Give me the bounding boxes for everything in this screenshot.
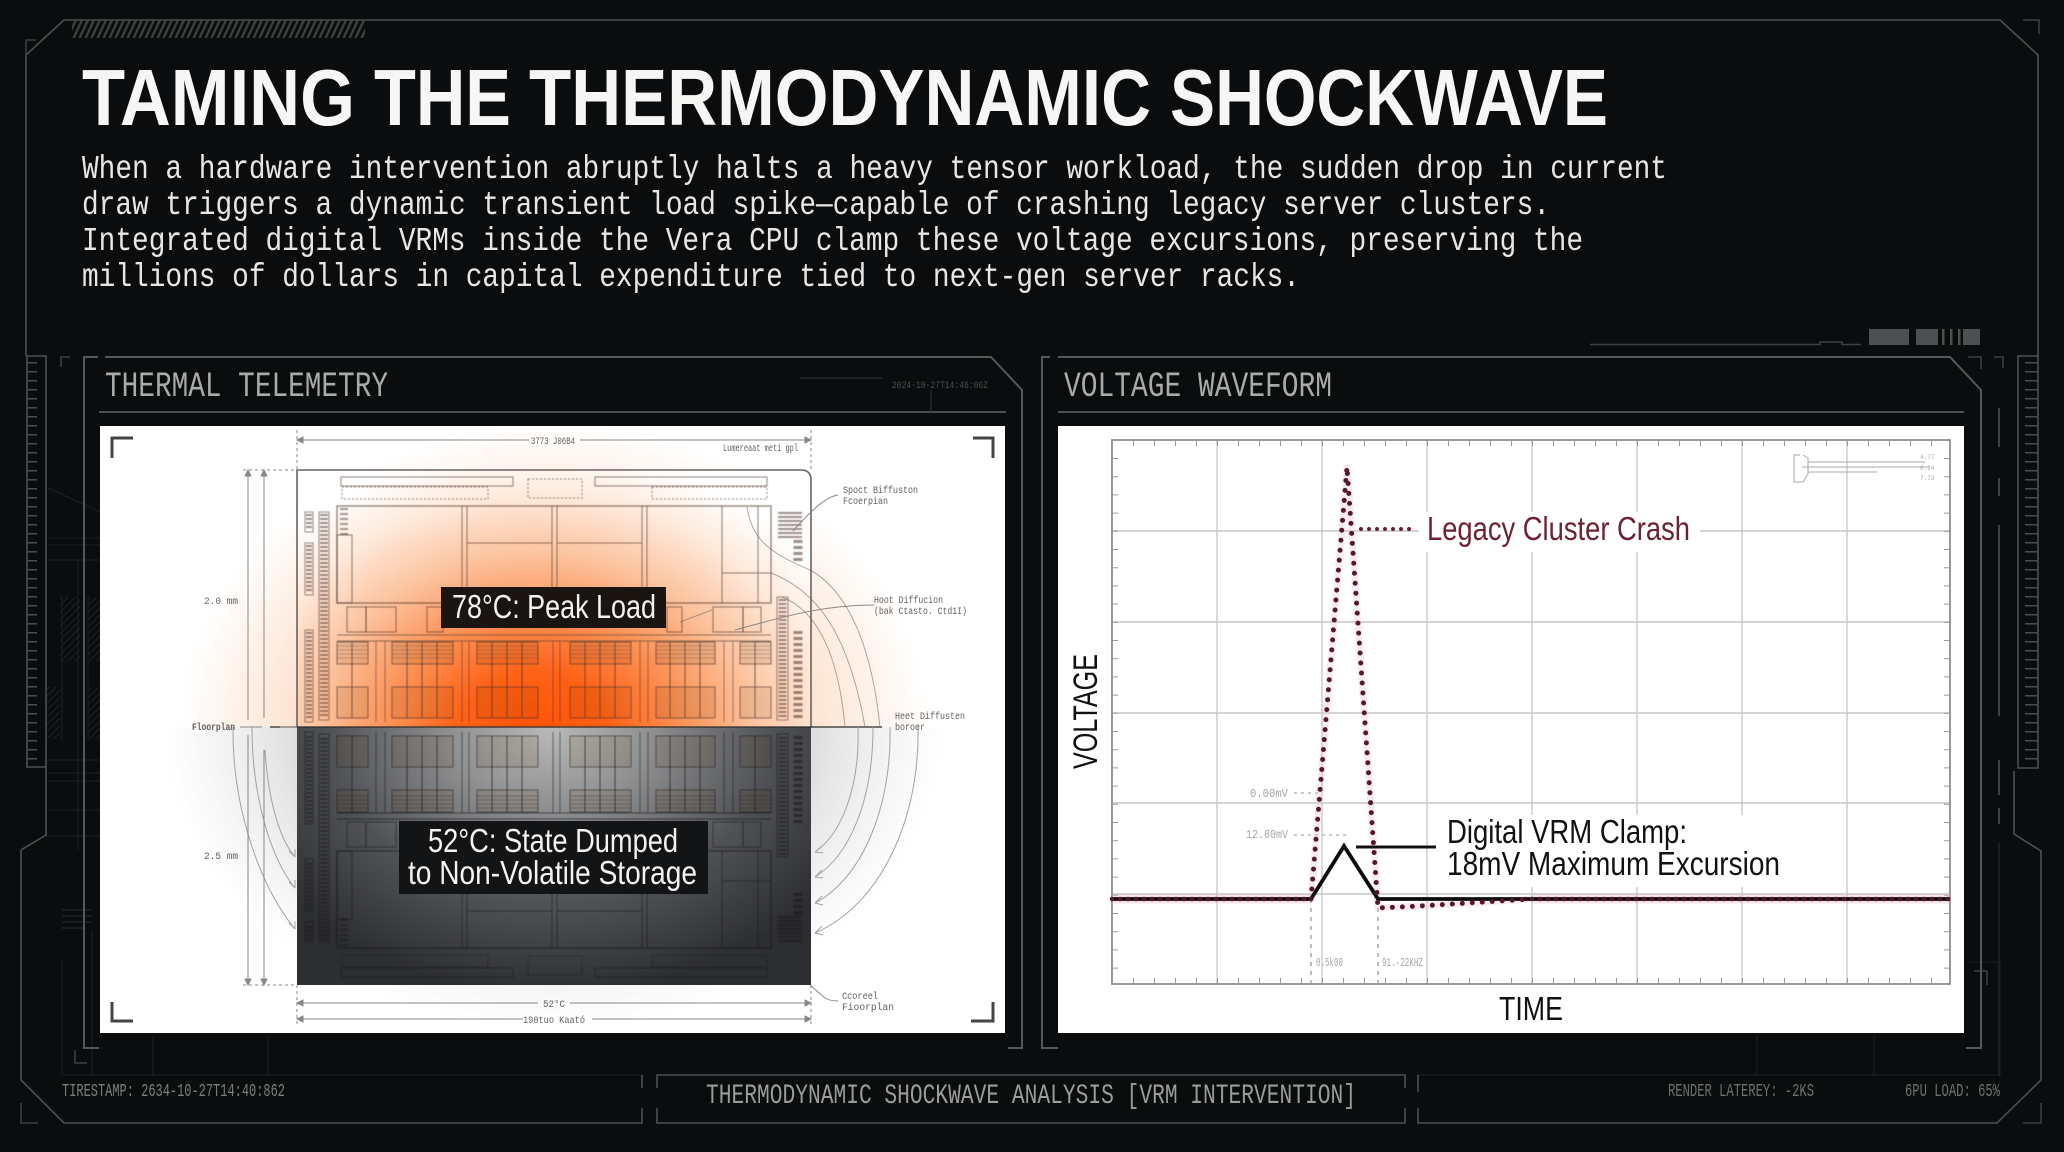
- inset mini waveform: 4.77: [1920, 454, 1935, 461]
- panel: voltage waveform: [1042, 357, 1981, 1048]
- technical annotations: (bak Ctasto. Ctd1I): [874, 606, 967, 618]
- intro paragraph: Integrated digital VRMs inside the Vera CPU clamp these voltage excursions, preserving the: [82, 223, 1583, 260]
- footer status: render latency: RENDER LATEREY: -2KS: [1668, 1082, 1814, 1102]
- heat glow outside chip: [100, 426, 1005, 727]
- chip floorplan, hot half: [305, 477, 798, 722]
- title: THERMODYNAMIC: [529, 53, 1151, 142]
- intro paragraph: millions of dollars in capital expenditure tied to next-gen server racks.: [82, 259, 1300, 296]
- technical annotations: 52°C: [543, 999, 565, 1011]
- technical annotations: 3773 J06B4: [531, 436, 575, 448]
- label: legacy cluster crash: Legacy Cluster Crash: [1427, 510, 1690, 547]
- chart grid: [1112, 440, 1950, 984]
- technical annotations: Fioorplan: [842, 1002, 894, 1014]
- cooling arcs left: [233, 727, 295, 929]
- heat glow on chip, top half: [297, 470, 811, 727]
- split line: [270, 726, 882, 728]
- title: THE: [374, 53, 511, 142]
- technical annotations: Fcoerpian: [843, 496, 888, 508]
- small axis readouts: 91.-22KHZ: [1382, 957, 1423, 970]
- callout: state dumped: [399, 821, 708, 894]
- chip floorplan, cold half: [305, 732, 798, 977]
- panel frame: [1042, 357, 1981, 1048]
- small axis readouts: 12.80mV: [1246, 829, 1288, 842]
- technical annotations: Lumereaat meti gpl: [723, 443, 798, 455]
- x axis label: TIME: [1499, 990, 1563, 1027]
- intro paragraph: draw triggers a dynamic transient load spike—capable of crashing legacy server clusters.: [82, 187, 1550, 224]
- chip outline: [297, 470, 811, 727]
- status bars, top right: [1590, 329, 1980, 345]
- panel: thermal telemetry: [84, 357, 1022, 1048]
- technical annotations: 2.0 mm: [204, 596, 238, 608]
- inset mini waveform: 7.73: [1920, 475, 1935, 482]
- header rule and timestamp: 2024-10-27T14:46:06Z: [892, 381, 988, 392]
- label: digital VRM clamp: 18mV Maximum Excursion: [1447, 845, 1780, 882]
- technical annotations: Spoct Biffuston: [843, 485, 918, 497]
- label: legacy cluster crash: [1361, 510, 1700, 552]
- header rule and timestamp: [99, 378, 1006, 412]
- technical annotations: Hoot Diffucion: [874, 595, 943, 607]
- small axis readouts: 0.00mV: [1250, 788, 1288, 801]
- technical annotations: Heet Diffusten: [895, 711, 965, 723]
- heat diffusion curves: [680, 507, 880, 727]
- ladder strips: [32, 362, 2032, 765]
- technical annotations: 190tuo Kaató: [523, 1015, 585, 1027]
- cooled chip, bottom half: [297, 727, 811, 985]
- panel frame: [84, 357, 1022, 1048]
- footer caption: THERMODYNAMIC SHOCKWAVE ANALYSIS [VRM INTERVENTION]: [706, 1081, 1356, 1112]
- technical annotations: 2.5 mm: [204, 851, 238, 863]
- cool halo, bottom half: [100, 727, 1005, 1033]
- legacy crash trace, halo: [1112, 467, 1950, 908]
- dashed time markers: [1311, 899, 1378, 984]
- small axis readouts: [1246, 788, 1423, 970]
- inset mini waveform: 8.24: [1920, 465, 1935, 472]
- label: digital VRM clamp: Digital VRM Clamp:: [1447, 813, 1687, 850]
- decorative hatch strip: [72, 21, 365, 38]
- technical annotations: boroer: [895, 722, 925, 734]
- crash trace dots: [1112, 467, 1950, 908]
- label: digital VRM clamp: [1356, 813, 1790, 887]
- dimension lines: [240, 430, 874, 1025]
- title: [82, 53, 1608, 142]
- technical annotations: Floorplan: [192, 722, 235, 734]
- panel heading: VOLTAGE WAVEFORM: [1064, 367, 1332, 407]
- footer status: timestamp: TIRESTAMP: 2634-10-27T14:40:862: [62, 1082, 285, 1102]
- y axis label: VOLTAGE: [1067, 654, 1105, 769]
- footer status: GPU load: 6PU LOAD: 65%: [1905, 1082, 2000, 1102]
- callout: peak load: 78°C: Peak Load: [452, 588, 656, 625]
- small axis readouts: 0.5k00: [1316, 957, 1343, 970]
- white thermal image: [100, 426, 1005, 1033]
- technical annotations: [192, 436, 967, 1027]
- intro paragraph: When a hardware intervention abruptly halts a heavy tensor workload, the sudden drop in current: [82, 151, 1667, 188]
- white chart background: [1058, 426, 1964, 1033]
- panel heading: THERMAL TELEMETRY: [105, 367, 388, 407]
- callout: state dumped: to Non-Volatile Storage: [408, 854, 697, 891]
- callout: state dumped: 52°C: State Dumped: [428, 822, 678, 859]
- title: SHOCKWAVE: [1170, 53, 1608, 142]
- cooling arcs right: [815, 727, 918, 935]
- digital VRM clamp trace: [1112, 846, 1950, 899]
- inset mini waveform: [1794, 454, 1935, 482]
- intro paragraph: [82, 151, 1667, 296]
- corner brackets: [112, 438, 993, 1021]
- title: TAMING: [82, 53, 355, 142]
- technical annotations: Ccoreel: [842, 991, 878, 1003]
- faint circuit traces, left and bottom: [46, 487, 2000, 1076]
